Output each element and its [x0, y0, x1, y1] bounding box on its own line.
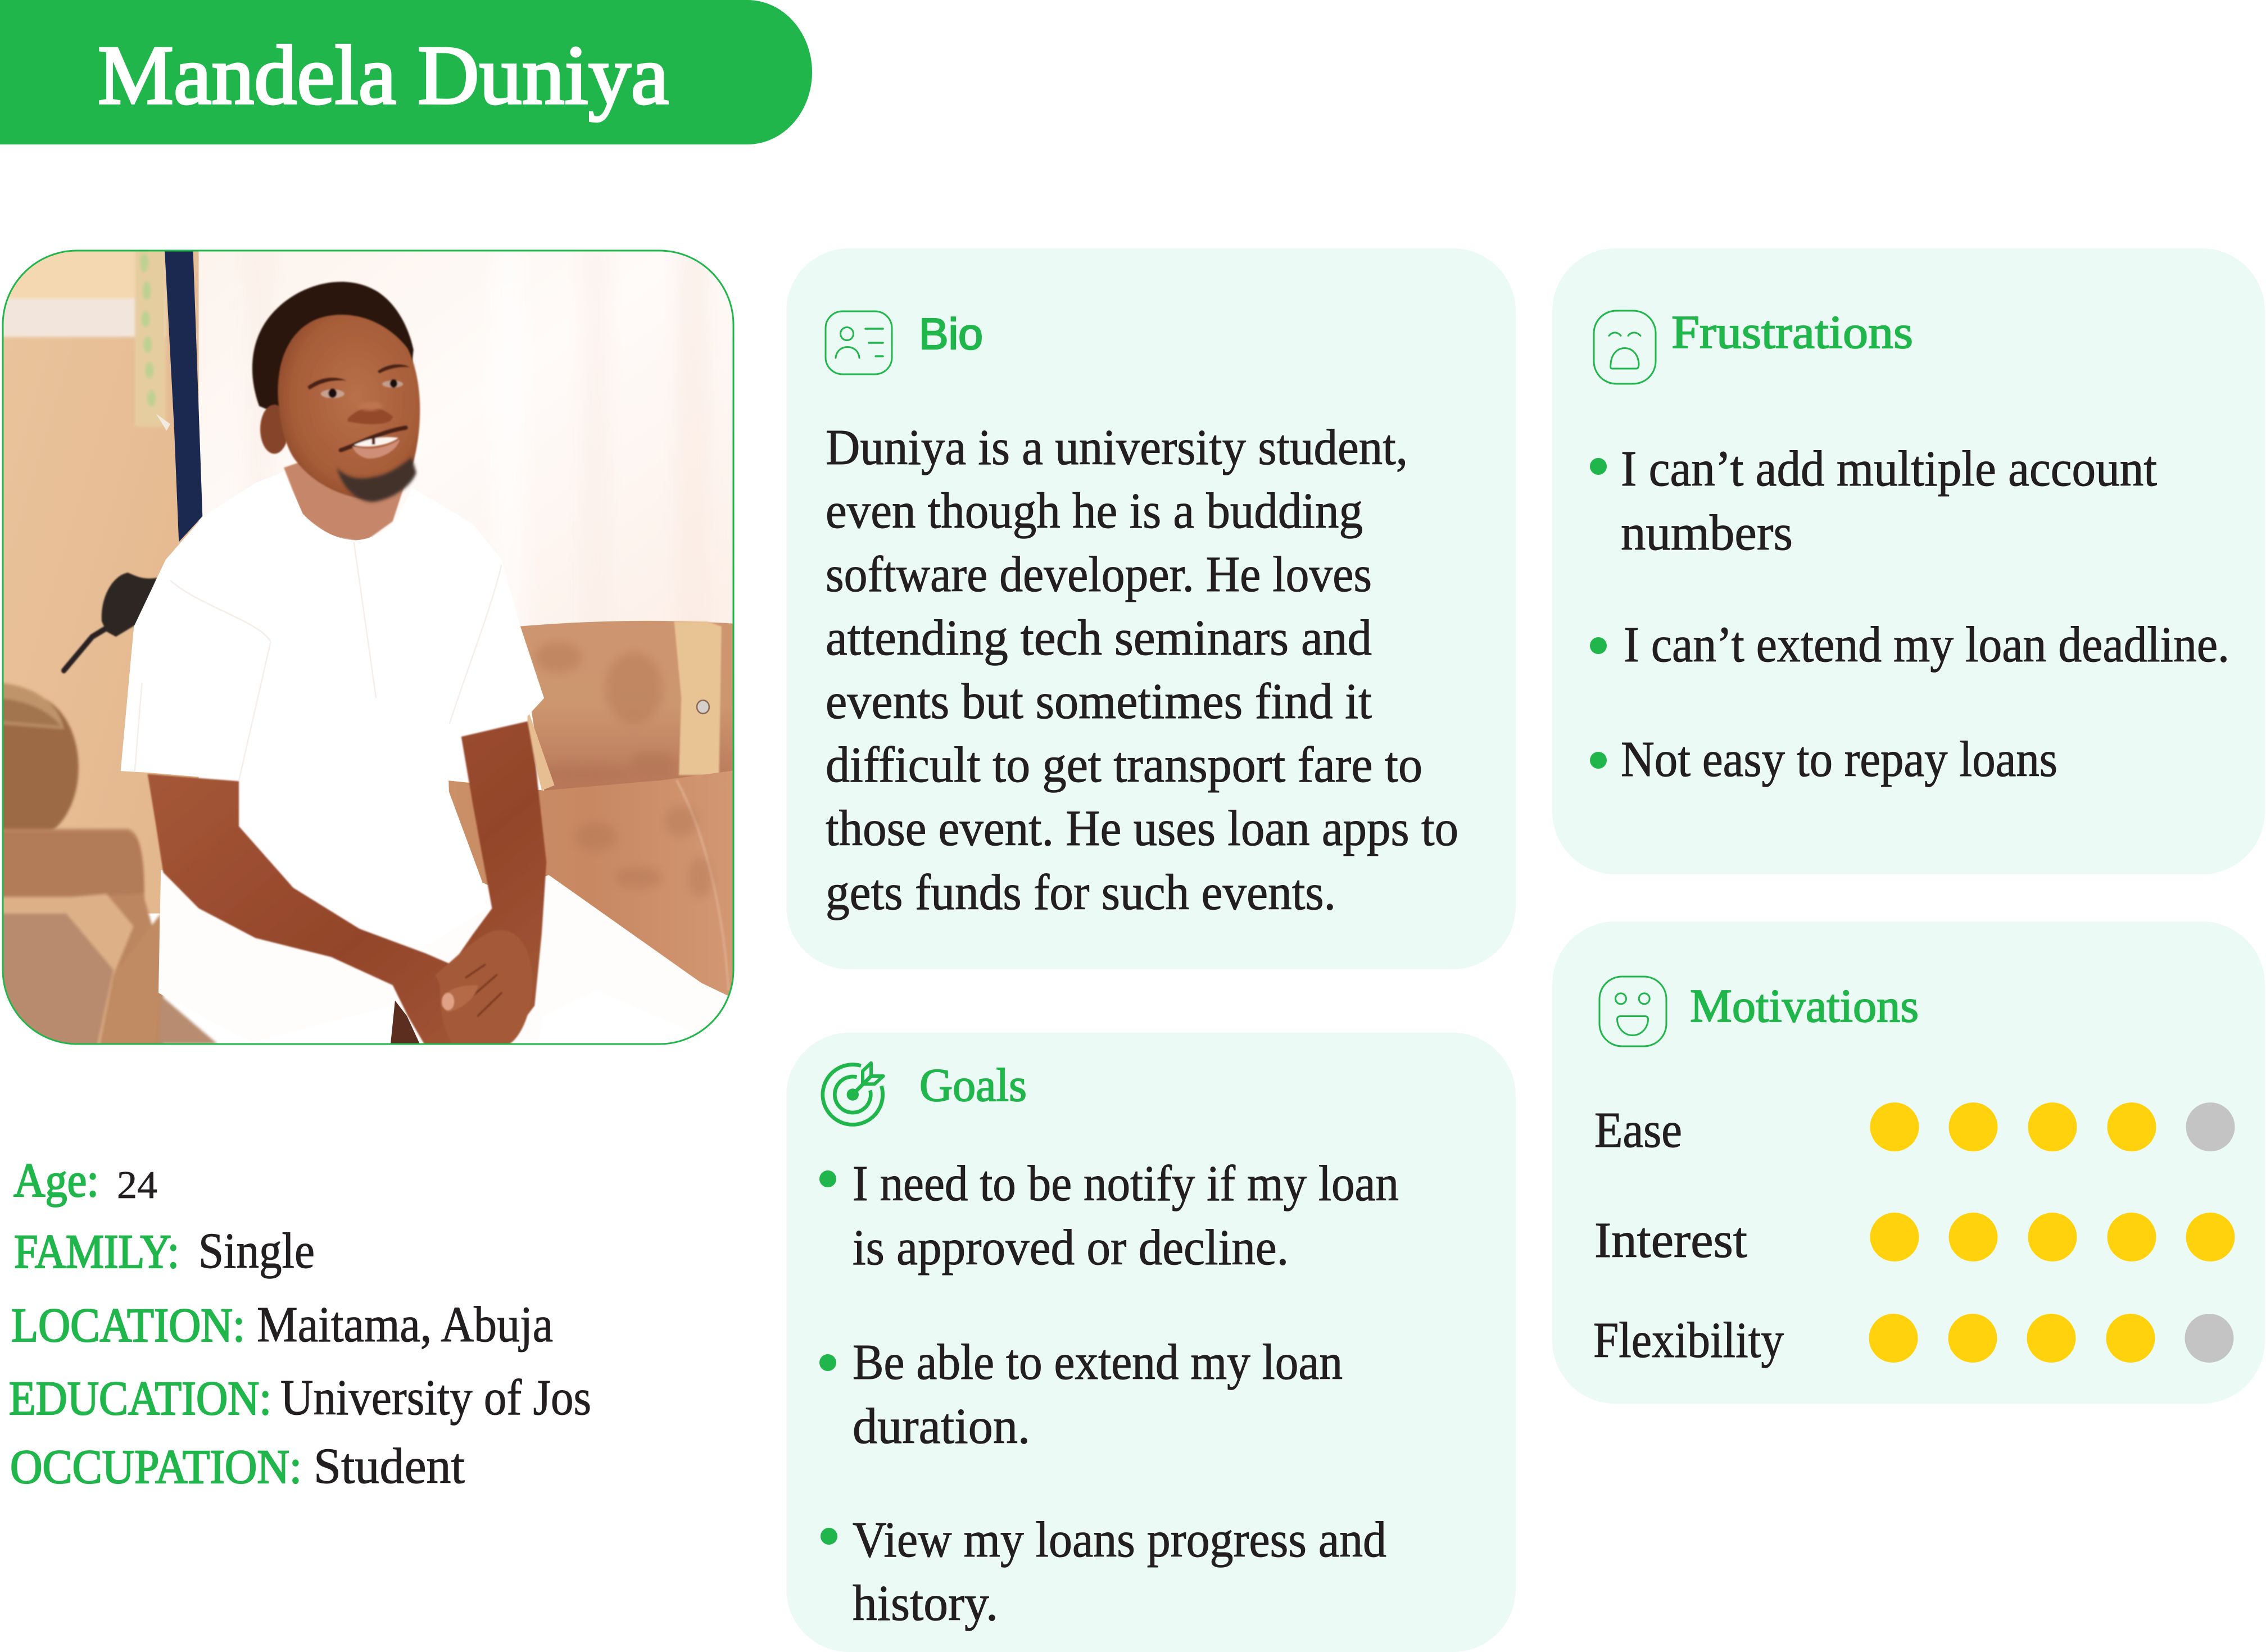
- education: University of Jos: [280, 1370, 591, 1426]
- heading: Frustrations: [1671, 306, 1913, 358]
- goal 2: [819, 1335, 1343, 1454]
- goal 2: duration.: [853, 1399, 1030, 1454]
- name banner: [0, 0, 812, 144]
- iron ornament: [64, 573, 157, 670]
- shirt torso: [120, 472, 544, 792]
- rating: interest: Interest: [1594, 1213, 1747, 1268]
- location: LOCATION:: [11, 1298, 245, 1352]
- face details: [307, 365, 416, 502]
- location: Maitama, Abuja: [257, 1297, 553, 1353]
- icon: id card: [826, 311, 892, 374]
- goal 1: [819, 1156, 1399, 1276]
- pot: [0, 683, 79, 840]
- frustration 3: Not easy to repay loans: [1621, 732, 2057, 787]
- photo frame: [3, 251, 733, 1044]
- family: Single: [198, 1223, 315, 1279]
- frustration 1: numbers: [1621, 505, 1793, 561]
- panel: bio: [786, 248, 1516, 969]
- bio text: attending tech seminars and: [826, 610, 1372, 666]
- occupation: OCCUPATION:: [10, 1440, 302, 1494]
- frustration 1: [1590, 441, 2157, 561]
- goal 1: I need to be notify if my loan: [853, 1156, 1399, 1211]
- age: Age:: [13, 1153, 99, 1207]
- goal 1: is approved or decline.: [853, 1220, 1289, 1276]
- bio text: [826, 420, 1458, 920]
- frustration 1: I can’t add multiple account: [1621, 441, 2157, 497]
- neck: [283, 462, 405, 541]
- heading: Bio: [919, 309, 983, 358]
- rating: flexibility: Flexibility: [1593, 1313, 1784, 1368]
- rating: ease: Ease: [1594, 1102, 1682, 1158]
- goal 3: [821, 1512, 1386, 1631]
- bio text: gets funds for such events.: [826, 865, 1336, 920]
- trousers: [158, 870, 702, 997]
- wall: [0, 247, 199, 914]
- arms and hands: [148, 721, 546, 1047]
- bio text: those event. He uses loan apps to: [826, 801, 1458, 856]
- rating: flexibility: [1593, 1313, 2233, 1368]
- ear: [260, 405, 288, 454]
- hair: [252, 282, 414, 416]
- education: [9, 1370, 591, 1426]
- goal 3: history.: [853, 1576, 998, 1631]
- bio text: events but sometimes find it: [826, 674, 1372, 729]
- goal 2: Be able to extend my loan: [853, 1335, 1343, 1390]
- education: EDUCATION:: [9, 1371, 271, 1425]
- left sofa: [0, 829, 217, 1047]
- family: [14, 1223, 315, 1279]
- rating: interest: [1594, 1213, 2235, 1268]
- navy pole: [165, 250, 202, 542]
- panel: goals: [786, 1033, 1516, 1652]
- location: [11, 1297, 553, 1353]
- bio text: even though he is a budding: [826, 483, 1363, 539]
- title: Mandela Duniya: [98, 29, 669, 122]
- heading: Goals: [919, 1059, 1027, 1111]
- icon: target: [823, 1063, 883, 1124]
- personal details: [9, 1153, 591, 1494]
- portrait photo: [0, 247, 743, 1047]
- right sofa: [445, 621, 738, 1001]
- bio text: software developer. He loves: [826, 547, 1372, 602]
- curtain background: [199, 252, 733, 626]
- icon: sad face: [1594, 311, 1656, 384]
- panel: motivations: [1552, 922, 2265, 1404]
- icon: happy face: [1599, 977, 1666, 1046]
- rating: ease: [1594, 1102, 2235, 1158]
- bio text: difficult to get transport fare to: [826, 737, 1422, 793]
- face: [278, 315, 420, 498]
- heading: Motivations: [1690, 980, 1919, 1032]
- panel: frustrations: [1552, 248, 2265, 874]
- bio text: Duniya is a university student,: [826, 420, 1408, 475]
- goal 3: View my loans progress and: [853, 1512, 1386, 1568]
- age: 24: [117, 1164, 157, 1207]
- age: [13, 1153, 157, 1207]
- shirt seams: [135, 542, 501, 780]
- occupation: Student: [314, 1438, 465, 1494]
- family: FAMILY:: [14, 1224, 179, 1278]
- occupation: [10, 1438, 465, 1494]
- frustration 2: I can’t extend my loan deadline.: [1624, 617, 2229, 673]
